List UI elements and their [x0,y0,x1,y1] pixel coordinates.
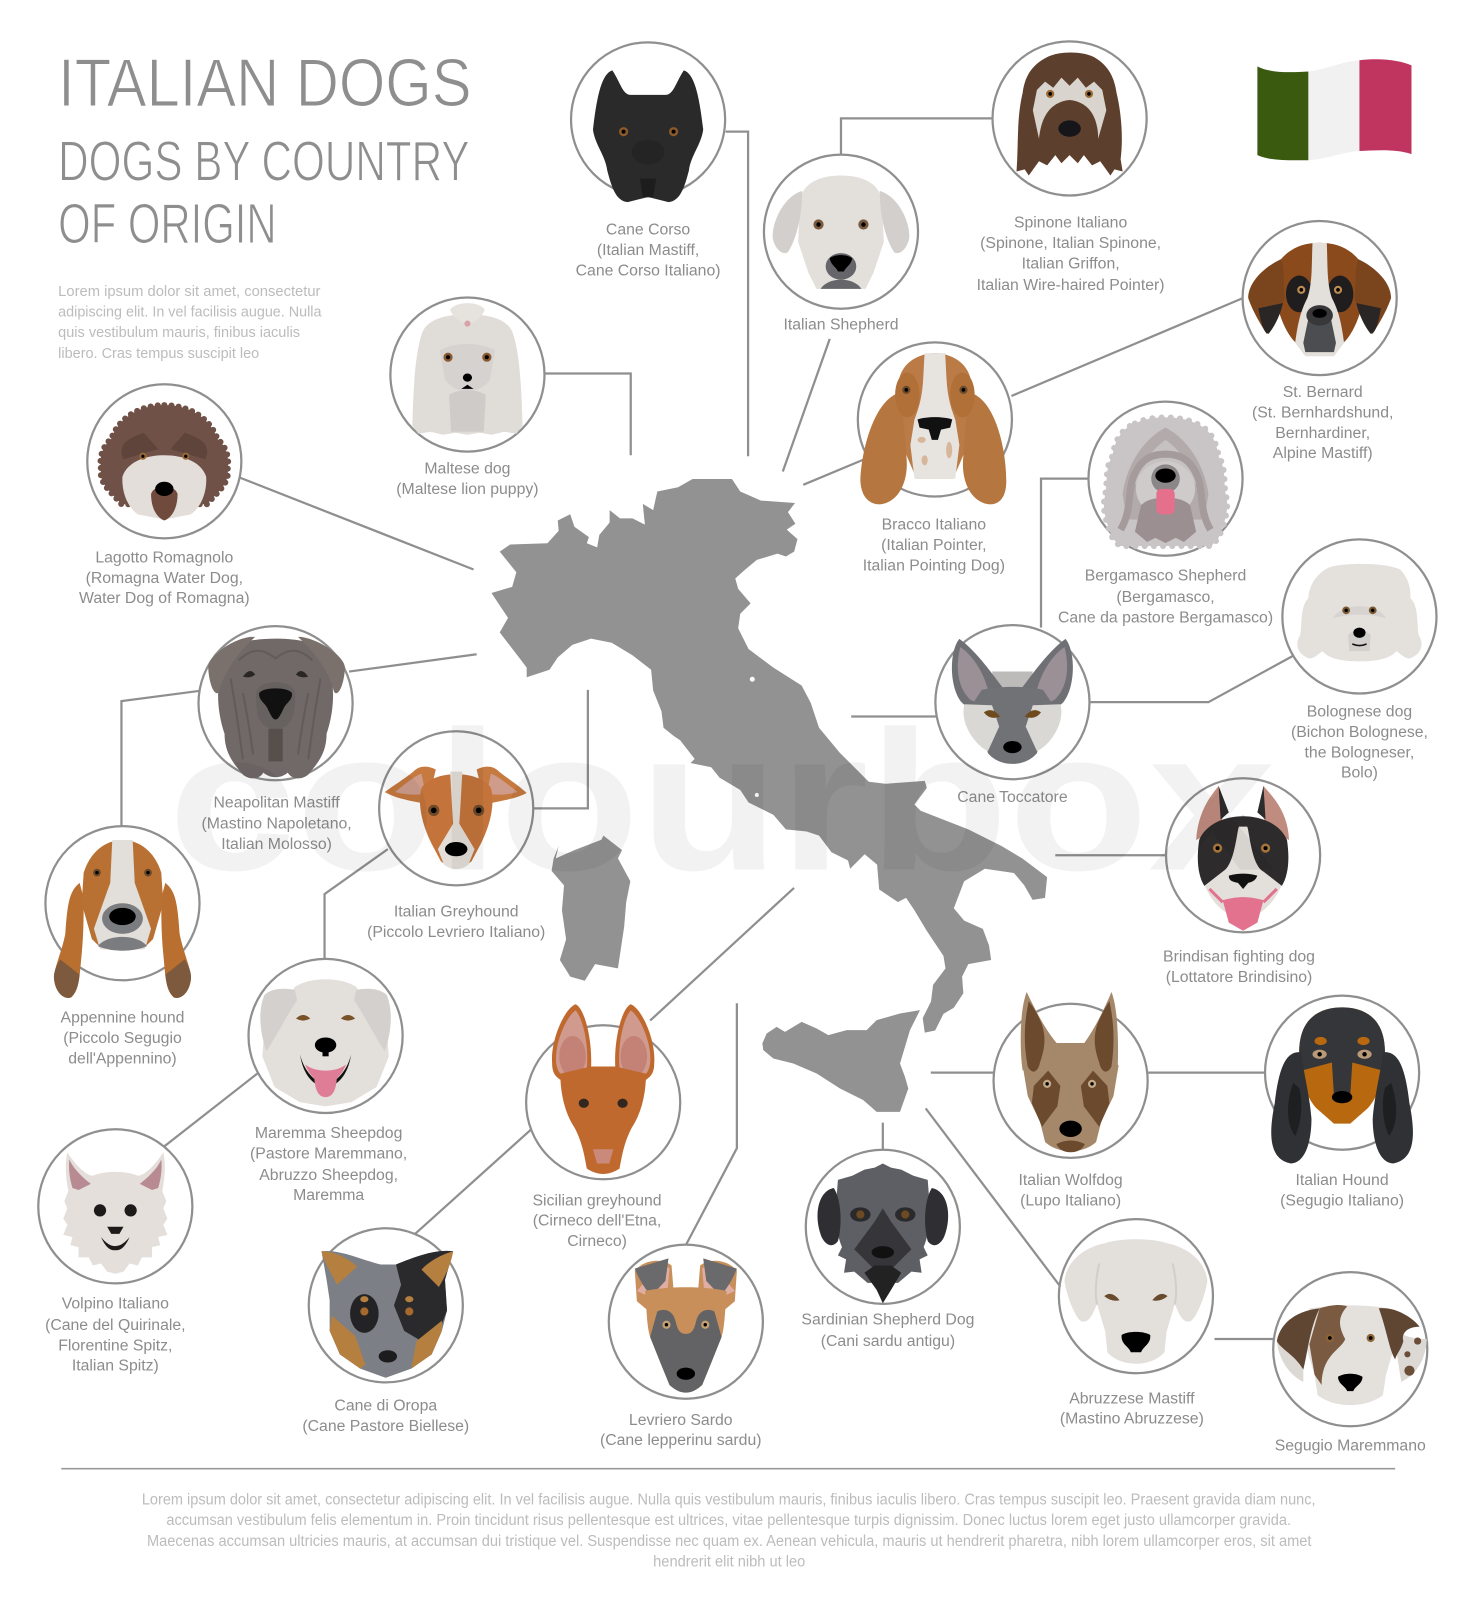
label: Spinone Italiano: Spinone Italiano [1014,215,1127,232]
panel: Spinone Italiano [977,41,1165,294]
label: Bergamasco Shepherd: (Bergamasco, [1116,589,1215,606]
footer paragraph [142,1491,1316,1571]
label: Bolognese dog: Bolognese dog [1307,703,1412,720]
label: Cane Corso: (Italian Mastiff, [597,242,699,259]
icon: Lagotto head [87,384,241,538]
label: Spinone Italiano: (Spinone, Italian Spinone, [980,235,1161,252]
panel: Italian Greyhound [367,731,545,941]
icon: Italian Hound head [1265,996,1419,1163]
title block [58,46,472,255]
icon: Sardinian head [806,1150,960,1304]
intro paragraph: adipiscing elit. In vel facilisis augue. Nulla [58,304,322,320]
connector: Neapolitan to Appennine [121,691,199,827]
label: Cane Corso: Cane Corso Italiano) [576,263,721,280]
label: Lagotto Romagnolo: Lagotto Romagnolo [95,549,233,566]
icon: Italian Greyhound head [379,731,533,885]
icon: Cane Corso head [571,42,725,202]
label: St. Bernard: (St. Bernhardshund, [1252,404,1393,421]
footer paragraph: Lorem ipsum dolor sit amet, consectetur adipiscing elit. In vel facilisis augue. Nulla quis vestibulum mauris, finibus iaculis libero. Cras tempus suscipit leo. Praesent gravida diam nunc, [142,1491,1316,1508]
intro paragraph: Lorem ipsum dolor sit amet, consectetur [58,284,321,300]
label: Maremma Sheepdog: Maremma Sheepdog [255,1125,402,1142]
panel: St. Bernard [1243,221,1397,462]
label: Italian Hound: (Segugio Italiano) [1280,1192,1404,1209]
label: Bolognese dog: the Bologneser, [1305,744,1414,761]
connector: Maremma to Volpino [163,1074,257,1147]
panel: Cane Corso [571,42,725,280]
connector: Sicilian to Oropa [408,1130,531,1240]
intro paragraph: libero. Cras tempus suscipit leo [58,346,259,362]
connector: Bracco [803,459,864,485]
label: Italian Greyhound: (Piccolo Levriero Italiano) [367,924,545,941]
connector: Maltese [545,374,631,455]
connector: Neapolitan to map [349,654,477,672]
label: Lagotto Romagnolo: Water Dog of Romagna) [79,590,250,607]
label: Levriero Sardo: (Cane lepperinu sardu) [600,1432,762,1449]
label: Italian Wolfdog: (Lupo Italiano) [1020,1192,1121,1209]
label: Italian Hound: Italian Hound [1296,1172,1389,1189]
connector: Toccatore [851,715,936,718]
main title: ITALIAN DOGS [58,46,472,121]
label: Neapolitan Mastiff: Italian Molosso) [221,836,332,853]
icon: Wolfdog head [994,992,1148,1158]
label: Spinone Italiano: Italian Griffon, [1022,255,1120,272]
icon: Maltese head [390,298,544,452]
label: St. Bernard: Bernhardiner, [1275,425,1370,442]
label: Bracco Italiano: Italian Pointing Dog) [863,558,1005,575]
icon: Neapolitan head [199,626,353,780]
label: Maltese dog: Maltese dog [424,461,510,478]
panel: Maltese dog [390,298,544,498]
icon: Maremma head [249,959,403,1113]
panel: Sicilian greyhound [526,1004,680,1250]
footer paragraph: hendrerit elit nibh ut leo [653,1554,805,1571]
map: mainland [491,479,1047,1033]
icon: Sicilian greyhound head [526,1004,680,1179]
map: Sardinia [552,836,630,981]
label: St. Bernard: Alpine Mastiff) [1273,445,1373,462]
connector: Italian Shepherd [783,339,830,472]
connector: Wolfdog to Hound [1148,1072,1266,1074]
intro paragraph: quis vestibulum mauris, finibus iaculis [58,325,300,341]
panel: Italian Shepherd [764,155,918,334]
label: Bracco Italiano: Bracco Italiano [882,517,986,534]
icon: Bracco head [858,342,1012,504]
label: Italian Greyhound: Italian Greyhound [394,903,519,920]
connector: Abruzzese to map [926,1108,1061,1288]
watermark: colourbox [168,691,1276,913]
label: Bolognese dog: (Bichon Bolognese, [1291,724,1428,741]
label: Brindisan fighting dog: (Lottatore Brindisino) [1166,969,1312,986]
label: Cane di Oropa: (Cane Pastore Biellese) [302,1418,469,1435]
label: Sardinian Shepherd Dog: Sardinian Shepherd Dog [801,1312,974,1329]
footer paragraph: Maecenas accumsan ultricies mauris, at accumsan dui tristique vel. Suspendisse nec quam ex. Aenean vehicula, mauris ut hendrerit pharetra, nibh lorem ullamcorper eros, sit amet [147,1533,1312,1550]
icon: Cane Toccatore head [935,625,1089,779]
label: Bergamasco Shepherd: Bergamasco Shepherd [1085,568,1246,585]
panel: Levriero Sardo [600,1245,763,1449]
label: Cane Corso: Cane Corso [606,222,690,239]
label: Spinone Italiano: Italian Wire-haired Pointer) [977,277,1165,294]
icon: Bolognese head [1282,539,1436,693]
label: Italian Shepherd: Italian Shepherd [783,317,899,334]
label: Lagotto Romagnolo: (Romagna Water Dog, [86,570,243,587]
connector: Wolfdog to map [931,1072,995,1074]
label: Levriero Sardo: Levriero Sardo [629,1412,733,1429]
label: Sicilian greyhound: Cirneco) [567,1233,627,1250]
connector: Bolognese [1089,655,1294,702]
label: Volpino Italiano: Italian Spitz) [72,1358,159,1375]
connector: St Bernard [1011,298,1243,396]
icon: Spinone head [993,41,1147,195]
label: Cane di Oropa: Cane di Oropa [334,1397,437,1414]
label: Italian Wolfdog: Italian Wolfdog [1019,1172,1123,1189]
panel: Abruzzese Mastiff [1059,1219,1213,1428]
label: Maremma Sheepdog: Abruzzo Sheepdog, [259,1167,398,1184]
label: Neapolitan Mastiff: (Mastino Napoletano, [202,816,352,833]
label: Bolognese dog: Bolo) [1341,765,1378,782]
panel: Bolognese dog [1282,539,1436,782]
label: Maltese dog: (Maltese lion puppy) [396,481,539,498]
panel: Segugio Maremmano [1273,1272,1427,1454]
label: Appennine hound: (Piccolo Segugio [63,1030,182,1047]
icon: Abruzzese head [1059,1219,1213,1373]
icon: Brindisan head [1166,778,1320,932]
panel: Appennine hound [45,826,200,1067]
label: Volpino Italiano: Florentine Spitz, [58,1337,172,1354]
intro paragraph [58,284,322,362]
connector: Levriero [686,1003,737,1245]
connector: Lagotto [240,478,474,569]
icon: Volpino head [38,1129,192,1283]
footer paragraph: accumsan vestibulum felis elementum in. Proin tincidunt risus pellentesque est ultrices, vitae pellentesque turpis dignissim. Donec luctus lorem eget justo ullamcorper gravida. [166,1512,1291,1529]
label: Abruzzese Mastiff: (Mastino Abruzzese) [1060,1411,1204,1428]
icon: Segugio head [1273,1272,1427,1426]
icon: Bergamasco head [1088,402,1243,556]
label: Appennine hound: Appennine hound [61,1010,184,1027]
label: Maremma Sheepdog: Maremma [293,1187,364,1204]
label: Neapolitan Mastiff: Neapolitan Mastiff [214,794,340,811]
label: Brindisan fighting dog: Brindisan fighting dog [1163,948,1315,965]
label: Sicilian greyhound: (Cirneco dell'Etna, [533,1213,661,1230]
icon: Oropa head [309,1228,463,1382]
label: Volpino Italiano: Volpino Italiano [62,1295,169,1312]
label: Abruzzese Mastiff: Abruzzese Mastiff [1069,1390,1195,1407]
map of Italy [491,479,1047,1033]
panel: Maremma Sheepdog [249,959,407,1204]
connector: Brindisan [1055,854,1167,856]
label: Bracco Italiano: (Italian Pointer, [881,537,987,554]
subtitle line one: DOGS BY COUNTRY [58,130,469,193]
panel: Volpino Italiano [38,1129,192,1375]
bottom divider [61,1468,1395,1470]
label: Cane Toccatore: Cane Toccatore [957,789,1068,806]
icon: Levriero head [609,1245,763,1399]
connector: Abruzzese to Segugio [1215,1338,1276,1340]
icon: St Bernard head [1243,221,1397,375]
label: St. Bernard: St. Bernard [1283,384,1363,401]
panel: Lagotto Romagnolo [79,384,250,607]
panel: Bracco Italiano [858,342,1012,575]
panel: Cane di Oropa [302,1228,469,1435]
icon: Appennine head [45,826,200,998]
label: Sardinian Shepherd Dog: (Cani sardu antigu) [821,1333,955,1350]
panel: Italian Wolfdog [994,992,1148,1209]
panel: Cane Toccatore [935,625,1089,806]
connector: Greyhound to Maremma [325,849,388,959]
panel: Italian Hound [1265,996,1419,1209]
connector: Cane Corso [726,132,748,456]
connector: Sicilian to map [650,888,794,1021]
icon: Italian flag [1257,59,1411,160]
label: Volpino Italiano: (Cane del Quirinale, [45,1317,186,1334]
map: Sicily [762,1010,920,1112]
panel: Sardinian Shepherd Dog [801,1150,974,1350]
panel: Neapolitan Mastiff [199,626,353,853]
panel: Bergamasco Shepherd [1058,402,1273,627]
label: Segugio Maremmano: Segugio Maremmano [1275,1437,1426,1454]
connector: Greyhound to map [533,690,588,808]
label: Maremma Sheepdog: (Pastore Maremmano, [250,1145,407,1162]
panel: Brindisan fighting dog [1163,778,1320,986]
label: Appennine hound: dell'Appennino) [68,1050,177,1067]
connector: Sardinian [882,1123,884,1150]
connector: Spinone [841,118,993,154]
label: Bergamasco Shepherd: Cane da pastore Bergamasco) [1058,610,1273,627]
label: Sicilian greyhound: Sicilian greyhound [533,1192,662,1209]
icon: Italian Shepherd head [764,155,918,309]
subtitle line two: OF ORIGIN [58,192,277,255]
connector: Bergamasco [1041,479,1089,628]
